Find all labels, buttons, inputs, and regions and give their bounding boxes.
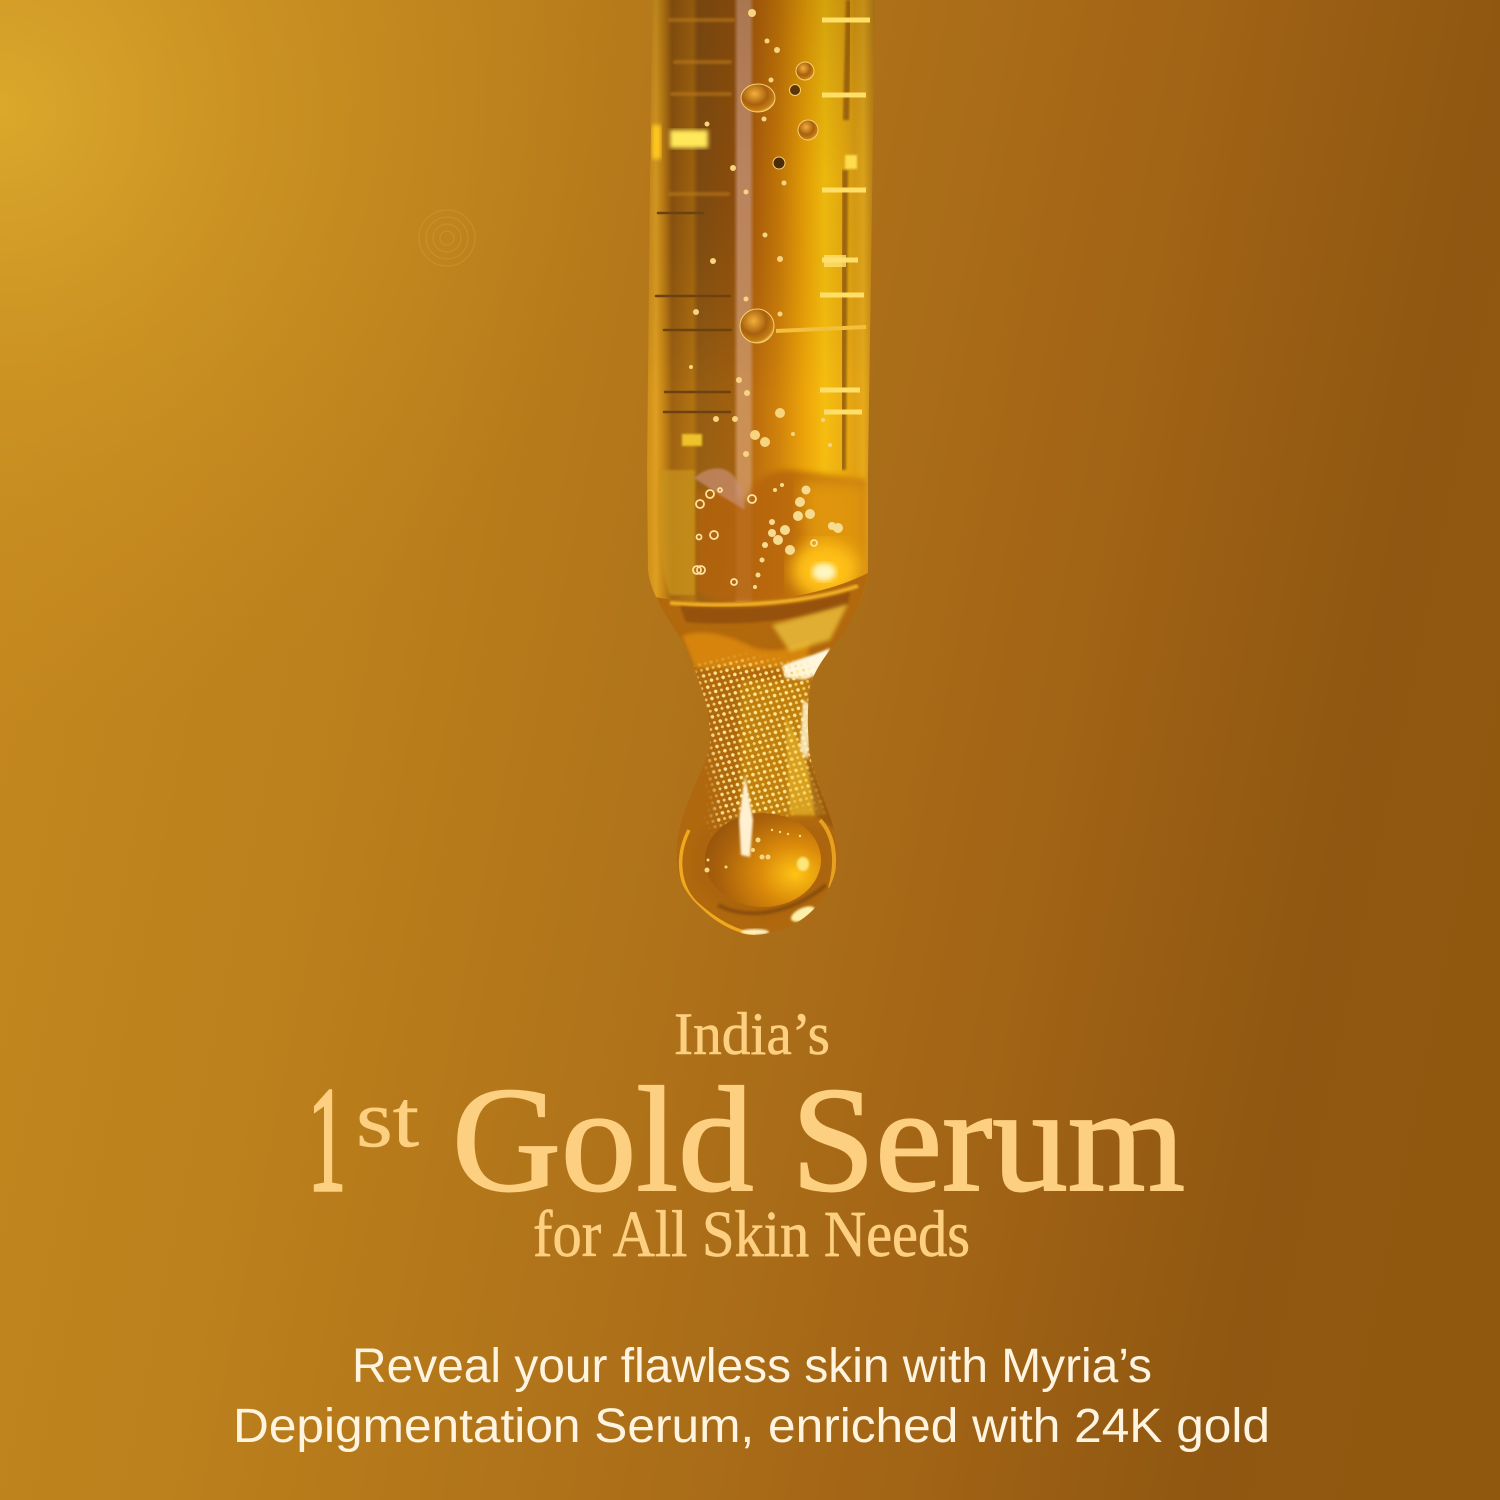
body text line 1: Reveal your flawless skin with Myria’s (352, 1340, 1152, 1393)
heading: 1st: st (356, 1073, 419, 1164)
small bubbles (689, 9, 832, 457)
heading: Gold Serum: Gold Serum (452, 1057, 1185, 1223)
dropper with serum drop (640, 0, 880, 940)
amber backing of liquid (676, 690, 838, 933)
heading: India's: India’s (674, 1001, 830, 1067)
glass pipette tube (647, 0, 875, 605)
heading: for All Skin Needs: for All Skin Needs (533, 1198, 970, 1271)
graduation ticks left (656, 20, 733, 412)
graduation ticks right (776, 0, 870, 470)
heading: 1st: 1 (308, 1057, 346, 1223)
large bubbles (740, 62, 818, 343)
icon: faint ripple mark on background (419, 210, 475, 266)
neck filled with gold particles (694, 653, 834, 832)
tube meniscus and amber shoulder (655, 572, 870, 690)
lower tube liquid with bubbles (658, 468, 868, 603)
heading: 1st (308, 1057, 419, 1223)
body text line 2: Depigmentation Serum, enriched with 24K gold (233, 1400, 1270, 1453)
drop body sphere (681, 775, 834, 935)
bright highlights in tube (652, 125, 857, 446)
